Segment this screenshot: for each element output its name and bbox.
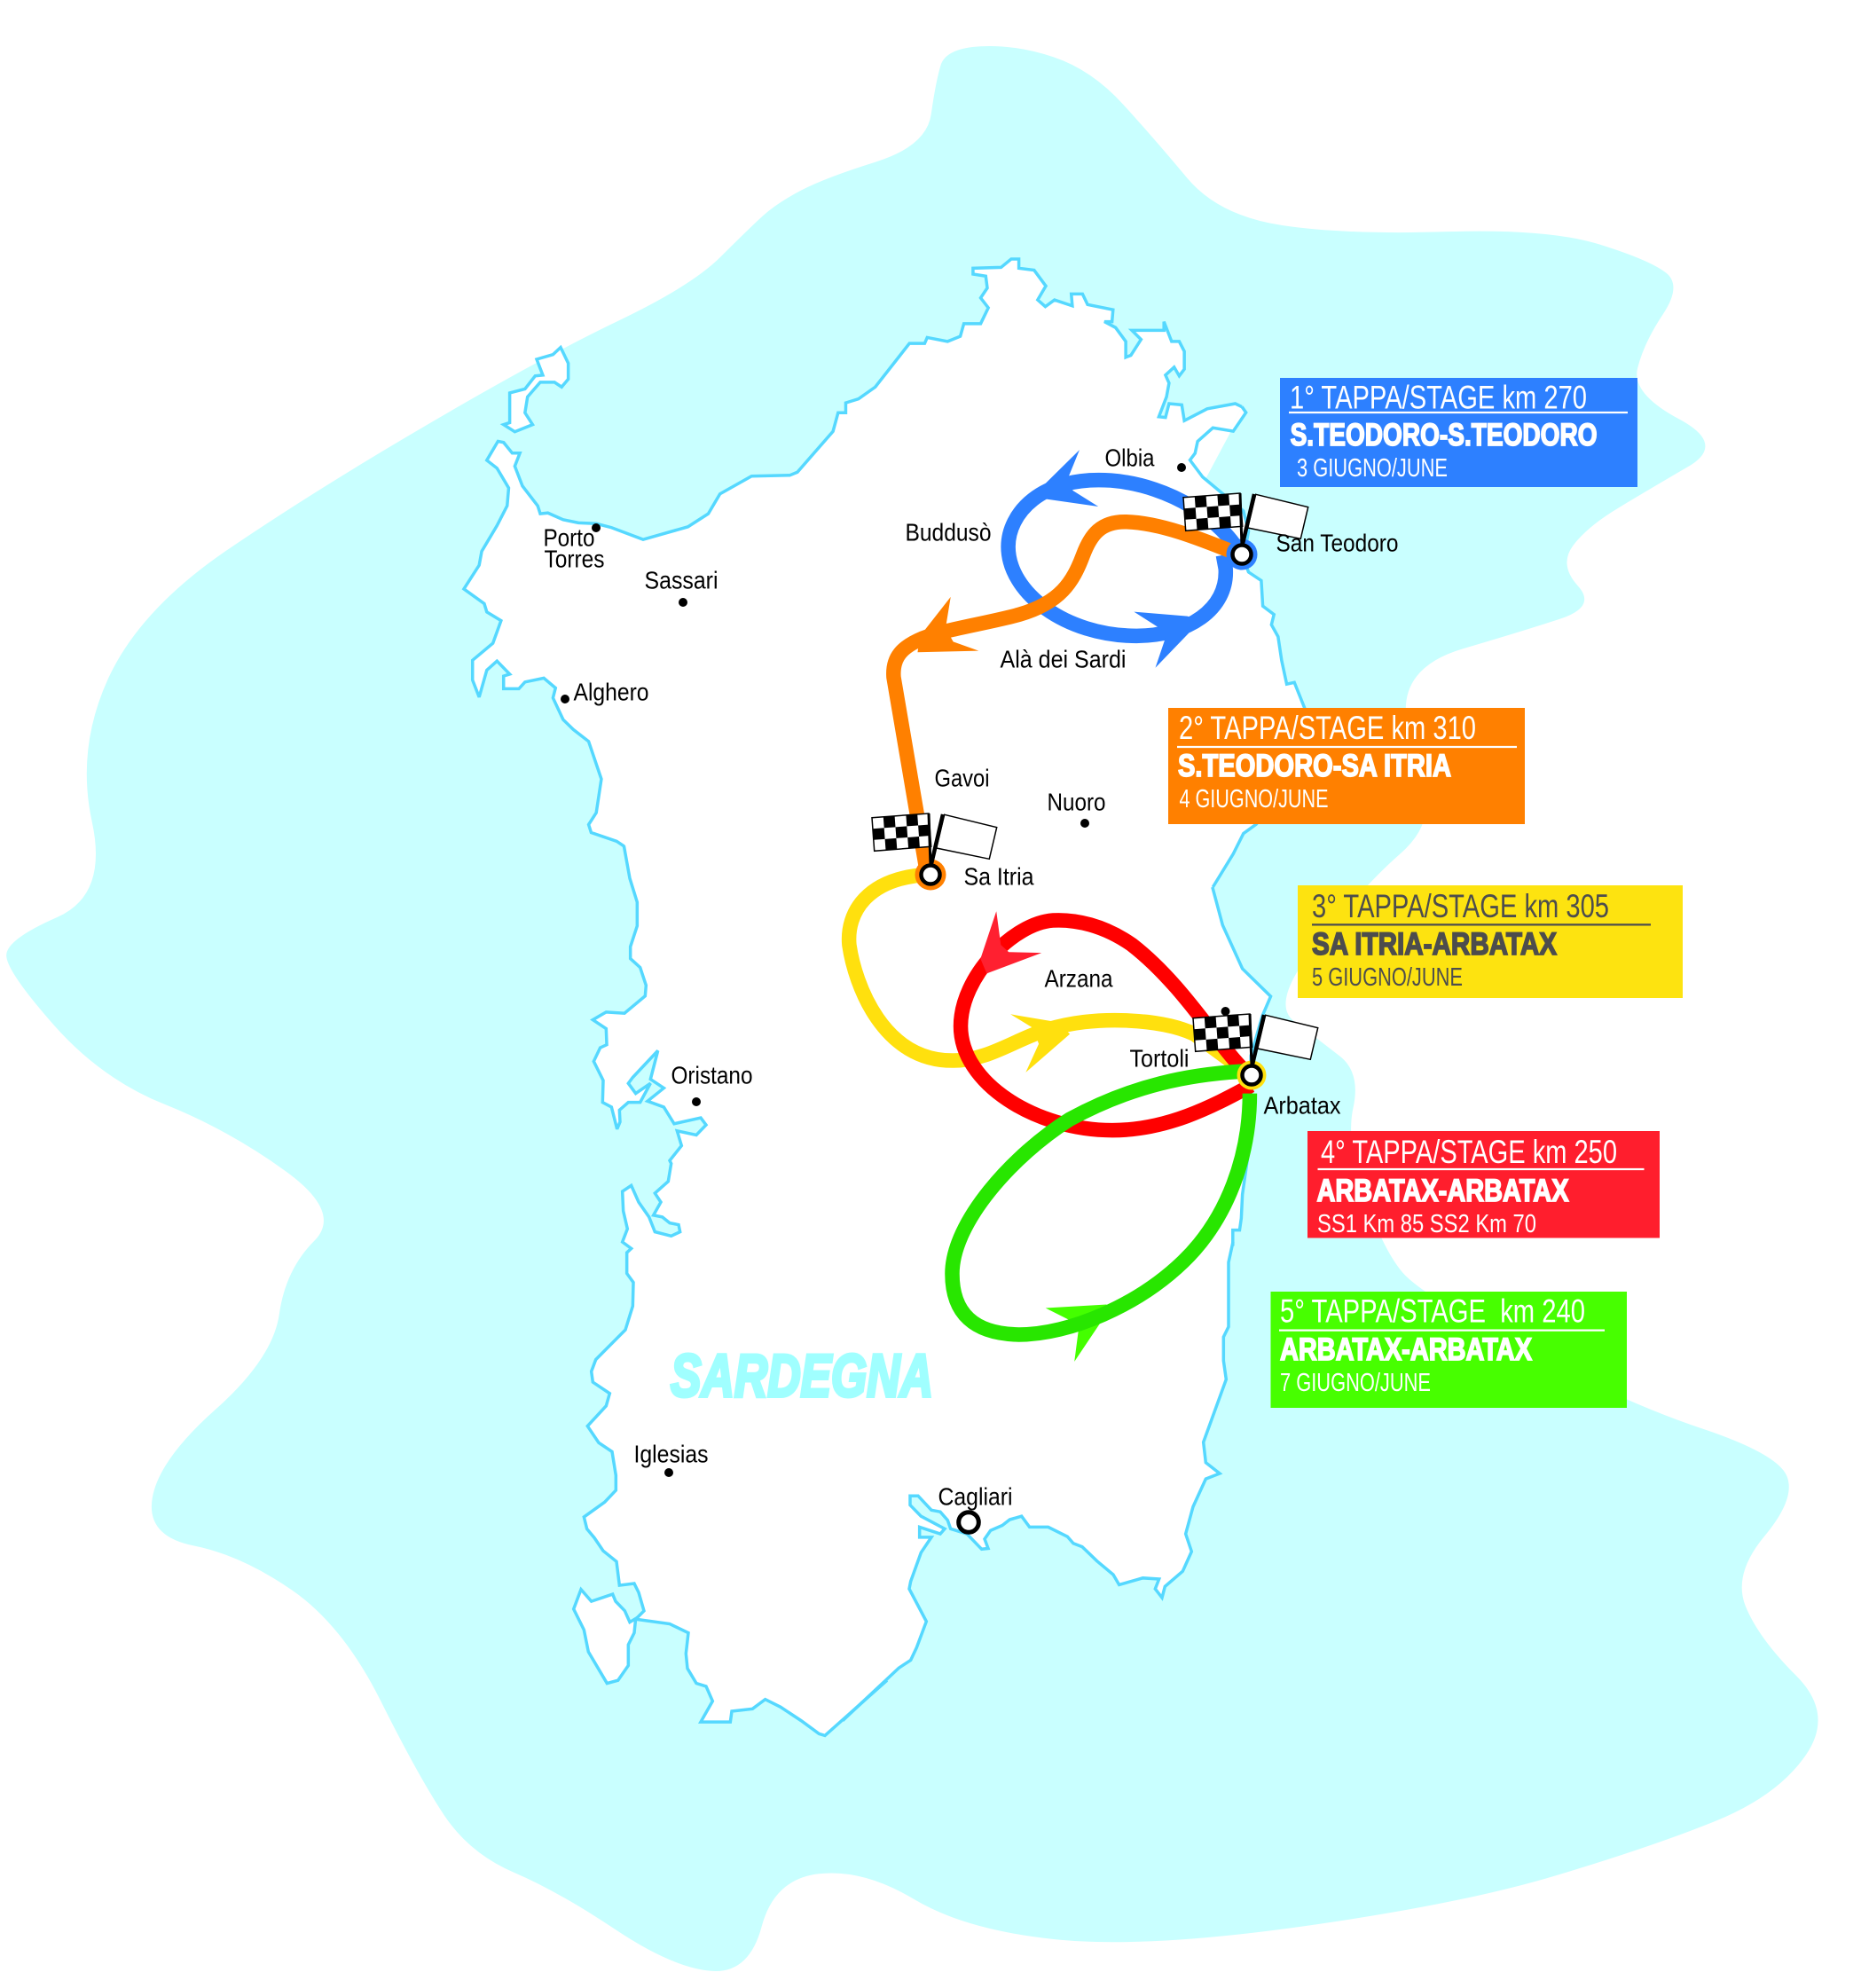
panel: stage 5: ARBATAX-ARBATAX	[1280, 1332, 1533, 1367]
route 4: red	[961, 911, 1251, 1130]
city labels: San Teodoro	[1276, 529, 1398, 557]
city labels: Nuoro	[1047, 788, 1105, 816]
panel: stage 3	[1298, 885, 1683, 998]
marker: San Teodoro flags	[1183, 493, 1308, 570]
city labels: Alghero	[573, 678, 649, 706]
panel: stage 4	[1307, 1131, 1660, 1238]
route 3: yellow	[849, 875, 1251, 1076]
coastline outline	[464, 259, 1309, 1735]
city labels: Sa Itria	[963, 862, 1034, 891]
panel: stage 3: SA ITRIA-ARBATAX	[1312, 927, 1558, 962]
panel: stage 3: 5 GIUGNO/JUNE	[1312, 963, 1463, 992]
city labels: Alà dei Sardi	[1001, 646, 1127, 672]
land: Sardinia island fill	[464, 259, 1309, 1735]
city labels: Porto	[543, 523, 594, 552]
panel: stage 2: 4 GIUGNO/JUNE	[1180, 785, 1329, 813]
city labels: Oristano	[671, 1061, 752, 1089]
panel: stage 4: 4° TAPPA/STAGE km 250	[1321, 1134, 1617, 1170]
city labels: Tortoli	[1130, 1045, 1189, 1072]
marker: Cagliari	[959, 1513, 978, 1532]
route 1: blue loop	[1009, 450, 1241, 668]
route 2: orange	[893, 522, 1241, 877]
route 5: green	[952, 1071, 1251, 1362]
city dots	[561, 463, 1229, 1477]
panel: stage 2	[1168, 708, 1525, 824]
panel: stage 4: SS1 Km 85 SS2 Km 70	[1317, 1210, 1536, 1238]
city labels	[543, 444, 1398, 1510]
city labels: Arzana	[1045, 965, 1113, 992]
panel: stage 1	[1280, 378, 1637, 487]
city labels: Sassari	[644, 566, 718, 594]
city labels: Arbatax	[1263, 1091, 1341, 1120]
panel: stage 1: S.TEODORO-S.TEODORO	[1291, 418, 1598, 452]
panel: stage 2: 2° TAPPA/STAGE km 310	[1179, 710, 1476, 746]
panel: stage 1: 1° TAPPA/STAGE km 270	[1290, 380, 1587, 415]
panel: stage 5: 7 GIUGNO/JUNE	[1280, 1369, 1431, 1397]
city labels: Olbia	[1105, 444, 1155, 472]
panel: stage 3: 3° TAPPA/STAGE km 305	[1312, 888, 1609, 924]
city labels: Cagliari	[938, 1483, 1013, 1510]
city labels: Torres	[545, 545, 605, 573]
panel: stage 5	[1270, 1292, 1627, 1408]
marker: Sa Itria flags	[872, 813, 997, 891]
city labels: Iglesias	[633, 1441, 708, 1467]
region label: SARDEGNA: SARDEGNA	[671, 1342, 933, 1410]
marker: Arbatax flags	[1193, 1014, 1318, 1089]
panel: stage 2: S.TEODORO-SA ITRIA	[1178, 749, 1451, 783]
panel: stage 1: 3 GIUGNO/JUNE	[1297, 454, 1448, 483]
panel: stage 4: ARBATAX-ARBATAX	[1316, 1174, 1569, 1208]
panel: stage 5: 5° TAPPA/STAGE km 240	[1280, 1293, 1585, 1330]
city labels: Gavoi	[935, 765, 990, 791]
city labels: Buddusò	[905, 518, 992, 546]
